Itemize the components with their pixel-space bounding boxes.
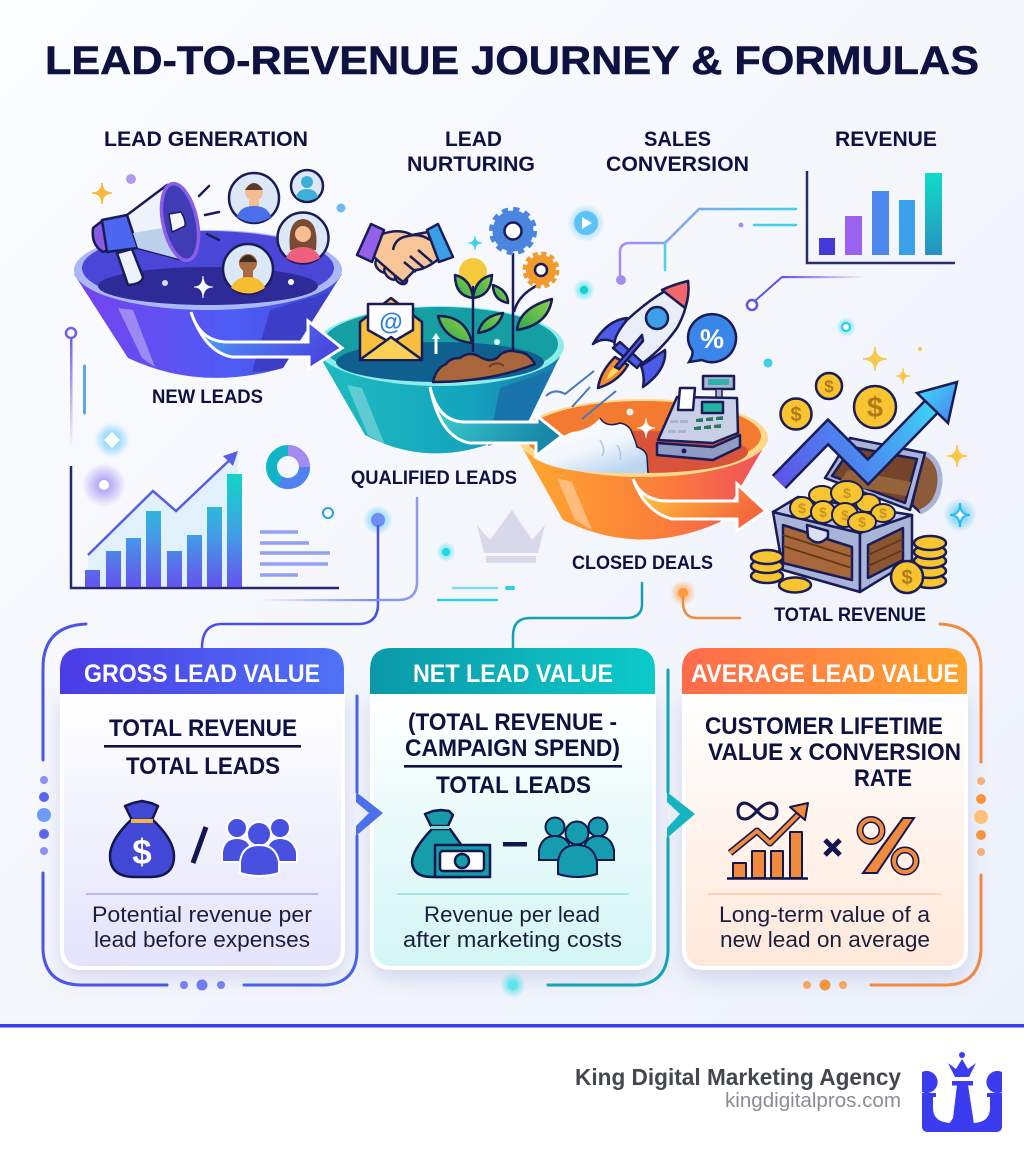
- footer agency name: kingdigitalpros.com: [725, 1090, 901, 1112]
- icon: lifetime growth chart: [727, 803, 808, 878]
- panel: net lead value: Revenue per lead: [424, 902, 600, 927]
- icon: email envelope: @: [379, 309, 403, 336]
- footer agency name: King Digital Marketing Agency: [575, 1064, 901, 1090]
- panel: average lead value: new lead on average: [720, 927, 930, 952]
- panel: gross lead value: [60, 648, 344, 968]
- panel: gross lead value: GROSS LEAD VALUE: [84, 660, 320, 688]
- panel: average lead value: Long-term value of a: [719, 902, 931, 927]
- connector lines from stages to cards: [202, 498, 740, 648]
- operator: multiply: [825, 840, 840, 855]
- icon: growing plants and gears: [433, 210, 557, 382]
- icon: people group: [222, 818, 297, 876]
- icon: percent bubble: [688, 314, 736, 362]
- icon: treasure chest: $: [819, 504, 827, 520]
- icon: treasure chest: [773, 438, 940, 592]
- panel: gross lead value: lead before expenses: [94, 927, 310, 952]
- stage headings: LEAD GENERATION: [104, 128, 308, 151]
- icon: lead avatars: [223, 170, 328, 294]
- stage captions: [152, 387, 926, 626]
- stage captions: TOTAL REVENUE: [774, 605, 926, 626]
- icon: cash register: [657, 376, 740, 460]
- icon: email envelope: [360, 298, 422, 360]
- bracket and dots: gross lead value: [37, 624, 383, 990]
- icon: gold coins: $: [824, 377, 834, 396]
- panel: average lead value: AVERAGE LEAD VALUE: [691, 660, 959, 688]
- bracket and glow: net lead value: [500, 670, 695, 998]
- bracket and dots: average lead value: [803, 624, 988, 990]
- panel: gross lead value: Potential revenue per: [92, 902, 312, 927]
- arrow: closed deals to total revenue: [633, 479, 766, 531]
- operator: divide: [193, 827, 206, 863]
- arrow: qualified leads to closed deals: [430, 387, 562, 456]
- stage headings: [104, 128, 937, 176]
- icon: treasure chest: $: [843, 485, 851, 501]
- icon: gold coins: $: [901, 567, 913, 589]
- panel: gross lead value: TOTAL REVENUE: [109, 715, 297, 742]
- icon: treasure chest: $: [879, 505, 887, 521]
- panel: net lead value: (TOTAL REVENUE -: [408, 709, 617, 736]
- stage headings: SALES: [644, 128, 711, 151]
- stage captions: CLOSED DEALS: [572, 553, 713, 574]
- icon: rocket: [593, 281, 689, 388]
- stage headings: NURTURING: [407, 153, 535, 176]
- icon: handshake: [357, 224, 453, 286]
- funnel bowl: lead generation: [74, 230, 342, 378]
- icon: treasure chest: $: [841, 507, 849, 523]
- panel: average lead value: RATE: [854, 765, 912, 792]
- icon: treasure chest: $: [798, 500, 806, 516]
- revenue bar chart: [807, 171, 955, 263]
- icon: percent: [860, 818, 916, 873]
- stage headings: LEAD: [445, 128, 502, 151]
- icon: percent bubble: %: [700, 324, 724, 354]
- panel: net lead value: CAMPAIGN SPEND): [405, 735, 620, 762]
- icon: gold coins: $: [790, 404, 802, 426]
- arrow: new leads to qualified leads: [191, 312, 342, 369]
- icon: gold coins: [751, 373, 946, 593]
- funnel bowl: lead nurturing: [316, 306, 564, 453]
- icon: money bag: $: [132, 833, 152, 872]
- icon: money bag: [110, 801, 174, 877]
- footer band: [0, 1024, 1024, 1154]
- icon: megaphone: [93, 180, 219, 285]
- icon: people group: [539, 818, 614, 877]
- footer agency name: [575, 1064, 901, 1112]
- left analytics chart: [71, 450, 339, 588]
- panel: net lead value: [370, 648, 655, 968]
- panel: gross lead value: TOTAL LEADS: [126, 753, 280, 780]
- icon: rising arrow: [779, 382, 957, 482]
- stage headings: CONVERSION: [606, 153, 749, 176]
- panel: net lead value: NET LEAD VALUE: [413, 660, 613, 688]
- title: LEAD-TO-REVENUE JOURNEY & FORMULAS: [45, 39, 979, 83]
- decorative connectors and glows: [66, 174, 977, 600]
- stage captions: QUALIFIED LEADS: [351, 468, 517, 489]
- stage captions: NEW LEADS: [152, 387, 263, 408]
- icon: treasure chest: $: [858, 514, 866, 530]
- stage headings: REVENUE: [835, 128, 937, 151]
- panel: net lead value: TOTAL LEADS: [436, 772, 591, 799]
- panel: average lead value: CUSTOMER LIFETIME: [705, 713, 943, 740]
- funnel bowl: sales conversion: [518, 399, 768, 540]
- icon: launch cloud: [533, 371, 648, 473]
- logo: crown and pawn: [922, 1052, 1002, 1132]
- icon: gold coins: $: [867, 392, 883, 424]
- panel: average lead value: VALUE x CONVERSION: [708, 739, 961, 766]
- panel: average lead value: [682, 648, 967, 968]
- operator: subtract: [503, 842, 527, 846]
- panel: net lead value: after marketing costs: [403, 927, 622, 952]
- icon: money bag and cash: [412, 810, 490, 877]
